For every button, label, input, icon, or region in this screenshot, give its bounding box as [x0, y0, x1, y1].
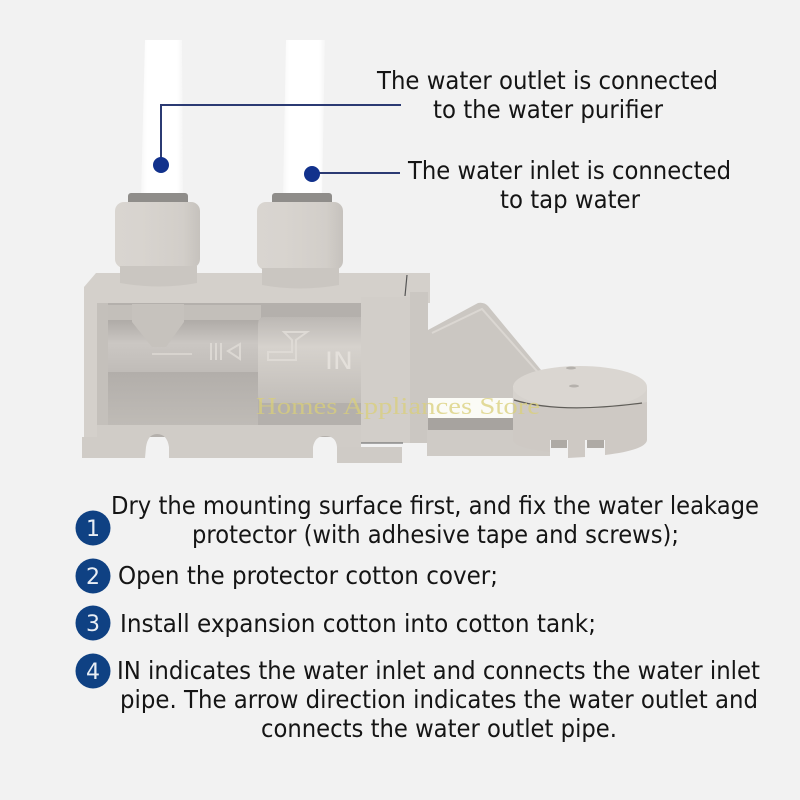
- step 4: pipe. The arrow direction indicates the water outlet and: [120, 685, 758, 714]
- step 4: connects the water outlet pipe.: [261, 714, 617, 743]
- product: water leakage protector: [82, 40, 647, 463]
- callout: water inlet: to tap water: [500, 185, 641, 214]
- step 3: 3: [86, 612, 100, 637]
- float arm and gap: [427, 303, 550, 456]
- watermark: Homes Appliances Store: [256, 394, 540, 420]
- step 4: [76, 654, 760, 743]
- callout: water outlet: to the water purifier: [433, 95, 664, 124]
- step 1: [76, 491, 759, 549]
- callout: water outlet: The water outlet is connected: [376, 66, 718, 95]
- step 1: protector (with adhesive tape and screws);: [192, 520, 679, 549]
- step 2: Open the protector cotton cover;: [118, 561, 498, 590]
- step 4: 4: [86, 660, 100, 685]
- callout: water outlet: [153, 66, 718, 173]
- housing body: [84, 273, 430, 437]
- right white pipe: [283, 40, 325, 196]
- step 1: 1: [86, 517, 100, 542]
- callout: water inlet: [304, 156, 731, 214]
- step 2: 2: [86, 565, 100, 590]
- left push-fit connector: [115, 193, 200, 286]
- front cover: [361, 275, 428, 443]
- base flange: [82, 425, 361, 463]
- float puck: [513, 366, 647, 458]
- step 3: Install expansion cotton into cotton tank;: [120, 609, 596, 638]
- left white pipe: [141, 40, 183, 196]
- callout: water inlet: The water inlet is connected: [407, 156, 731, 185]
- embossed IN mark: IN: [325, 347, 353, 375]
- right push-fit connector: [257, 193, 343, 288]
